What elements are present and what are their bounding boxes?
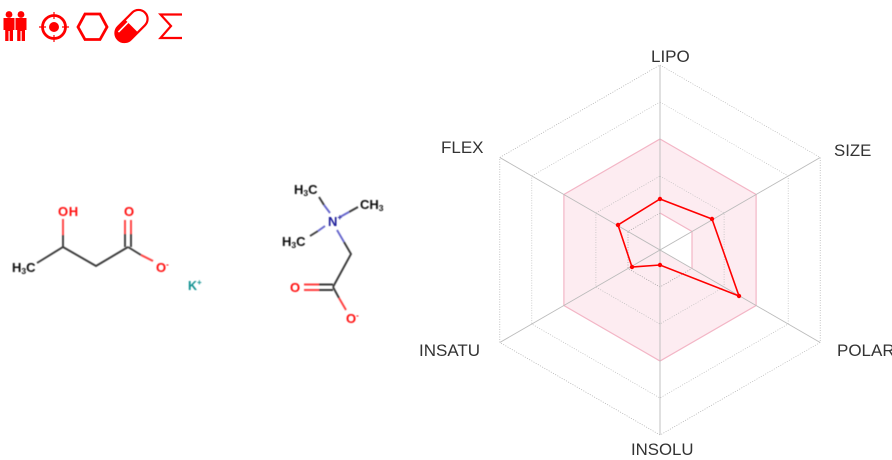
data polygon [616, 197, 741, 298]
atom label: H3C: C [26, 260, 36, 275]
atom label: N plus: N [328, 214, 337, 229]
atom label: N plus: + [337, 213, 342, 222]
bonds [37, 219, 153, 266]
axis label: FLEX: FLEX [441, 138, 484, 157]
atom label: H3C: H [12, 260, 21, 275]
atom label: OH: OH [58, 204, 79, 219]
atom label: O minus: - [166, 260, 169, 269]
range band outline [564, 139, 756, 361]
grid hexagons [500, 65, 820, 435]
axes [500, 65, 820, 435]
atom label: O: O [290, 280, 300, 295]
atom label: top H3C: C [308, 182, 318, 197]
atom label: O minus: O [346, 311, 356, 326]
icon: capsule [112, 6, 151, 46]
axis label: SIZE: SIZE [834, 141, 871, 160]
atom label: O minus: O [156, 260, 166, 275]
bonds [304, 197, 358, 310]
atom label: top H3C: H [294, 182, 303, 197]
radar chart [419, 47, 892, 459]
atom label: K plus: K [188, 279, 197, 293]
atom label: right CH3: CH [360, 197, 379, 212]
atom label: top H3C: 3 [303, 188, 308, 198]
icon: hexagon [78, 14, 107, 40]
axis label: INSATU: INSATU [419, 341, 480, 360]
atom label: right CH3: 3 [379, 203, 384, 213]
atom label: K plus: + [197, 278, 202, 287]
icon: sigma [160, 14, 182, 38]
atom label: O: O [124, 204, 134, 219]
atom label: left H3C: C [296, 234, 306, 249]
atom label: H3C: 3 [21, 266, 26, 276]
icon row [4, 6, 182, 46]
icon: people [4, 11, 26, 41]
optimal range band [564, 139, 756, 361]
atom label: left H3C: H [282, 234, 291, 249]
molecule: betaine [282, 182, 384, 326]
axis label: INSOLU: INSOLU [631, 440, 693, 459]
atom label: O minus: - [356, 311, 359, 320]
molecule: potassium 3-hydroxybutyrate [12, 204, 202, 293]
atom label: left H3C: 3 [291, 240, 296, 250]
icon: target [39, 12, 69, 42]
axis label: LIPO: LIPO [651, 47, 690, 66]
